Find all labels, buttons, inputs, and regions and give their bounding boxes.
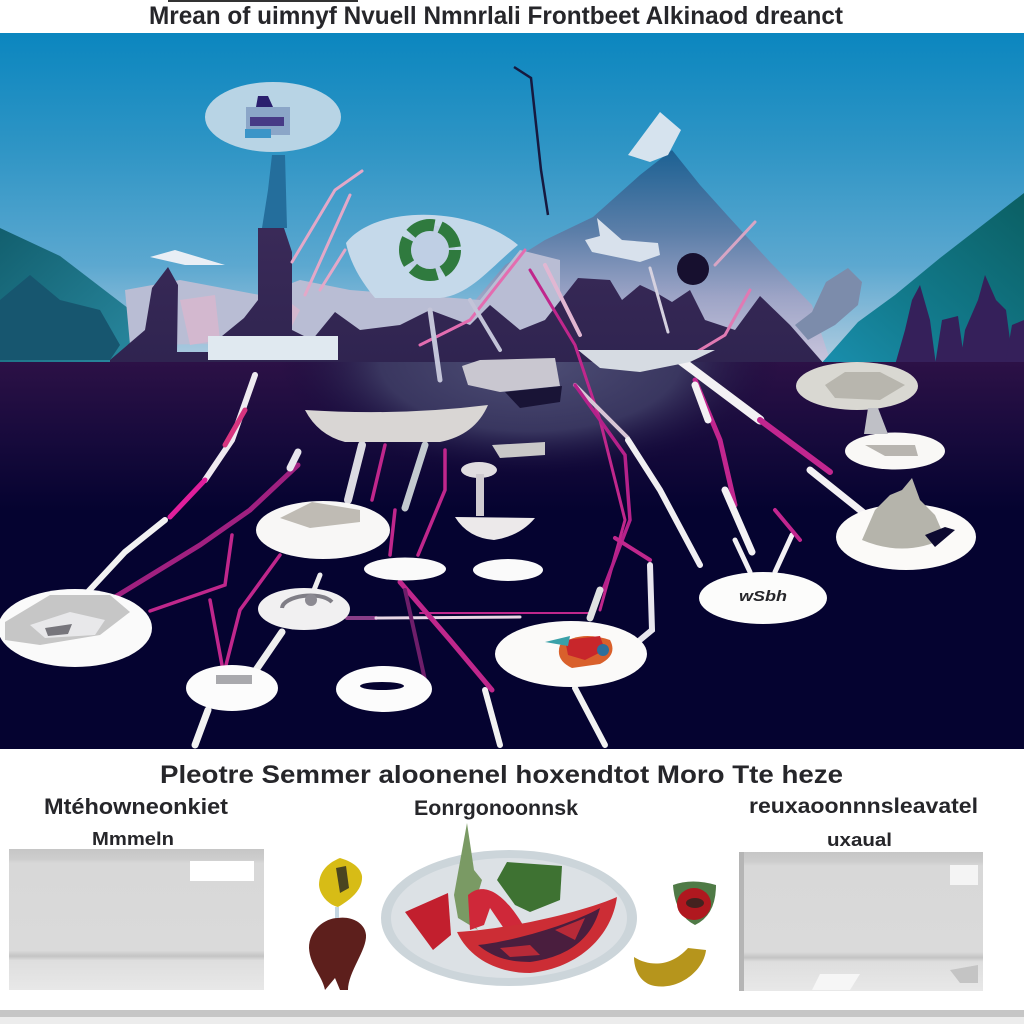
plate: centre left — [256, 501, 390, 559]
shoe shadow — [505, 386, 562, 408]
label: centre heading: Eonrgonoonnsk — [414, 797, 578, 820]
label block — [208, 336, 338, 360]
mushroom plate — [455, 462, 535, 540]
plate: far left — [0, 589, 152, 667]
plate: bottom left ring — [186, 665, 278, 711]
black antenna line — [514, 67, 548, 215]
label: left heading: Mtéhowneonkiet — [44, 794, 229, 819]
snow patch on peak — [585, 218, 660, 262]
dark skyline — [110, 228, 825, 365]
plate: bottom ring — [336, 666, 432, 712]
small label pill — [492, 442, 545, 458]
icon: central food plate — [381, 823, 637, 986]
blotches on left hill — [0, 275, 120, 360]
callout: tree dome — [346, 215, 518, 298]
plate: top right — [796, 362, 918, 434]
plate: teapot — [836, 478, 976, 570]
plate: small pill A — [364, 558, 446, 580]
icon: yellow fruit — [319, 858, 362, 919]
mountain: central peak — [450, 150, 830, 360]
plate: right bottom with glyphs — [699, 572, 827, 624]
panel: left grey box — [9, 849, 264, 990]
hill: right — [820, 193, 1024, 365]
pale haze behind skyline — [125, 250, 560, 345]
pale speckled tree — [795, 268, 862, 340]
panel: landscape scene — [0, 33, 1024, 749]
icon: red fruit in green cup — [673, 882, 716, 925]
centre magenta fork — [400, 582, 492, 690]
plate: small right — [845, 432, 945, 470]
callout: top ellipse — [205, 82, 341, 152]
horizontal link — [347, 616, 376, 620]
plate: food colourful — [495, 621, 647, 687]
plate: small pill B — [473, 559, 543, 581]
pink sky streaks — [292, 171, 362, 295]
footer bar — [0, 1010, 1024, 1017]
connectors under bowl — [348, 445, 362, 500]
title: Mrean of uimnyf Nvuell Nmnrlali Frontbeet Alkinaod dreanct — [149, 2, 844, 30]
bar top right of mid — [578, 350, 715, 372]
tower — [262, 155, 287, 228]
icon: banana — [634, 948, 706, 987]
tree silhouettes on right hill — [895, 275, 1024, 365]
thick magenta connector — [115, 465, 298, 597]
mountain to centre connectors — [530, 270, 625, 610]
hill: left — [0, 228, 150, 362]
magenta lower left — [150, 535, 280, 665]
sky — [0, 33, 1024, 365]
plate: right bottom with glyphs: wSbh — [739, 588, 787, 605]
label: left sub heading: Mmmeln — [92, 829, 174, 849]
label: right heading: reuxaoonnnsleavatel — [749, 795, 978, 818]
white cloud — [150, 250, 225, 265]
shallow bowl — [305, 405, 488, 442]
connector lines — [85, 171, 870, 745]
centre glow on ground — [330, 362, 729, 458]
dark disc — [677, 253, 709, 285]
label: right sub heading: uxaual — [827, 830, 892, 850]
white stems lower left — [310, 575, 320, 600]
left long connector — [205, 375, 255, 480]
snow block on peak — [628, 112, 681, 162]
plate: spiral — [258, 588, 350, 630]
icon: dark heart-shaped fruit — [309, 918, 366, 990]
heading: section: Pleotre Semmer aloonenel hoxendtot Moro Tte heze — [160, 761, 843, 789]
ground — [0, 362, 1024, 749]
right connectors — [680, 360, 760, 420]
panel: right grey box — [739, 852, 983, 991]
shoe-like object — [462, 358, 560, 392]
pink blotches in haze — [180, 295, 300, 345]
footer lower strip — [0, 1017, 1024, 1024]
